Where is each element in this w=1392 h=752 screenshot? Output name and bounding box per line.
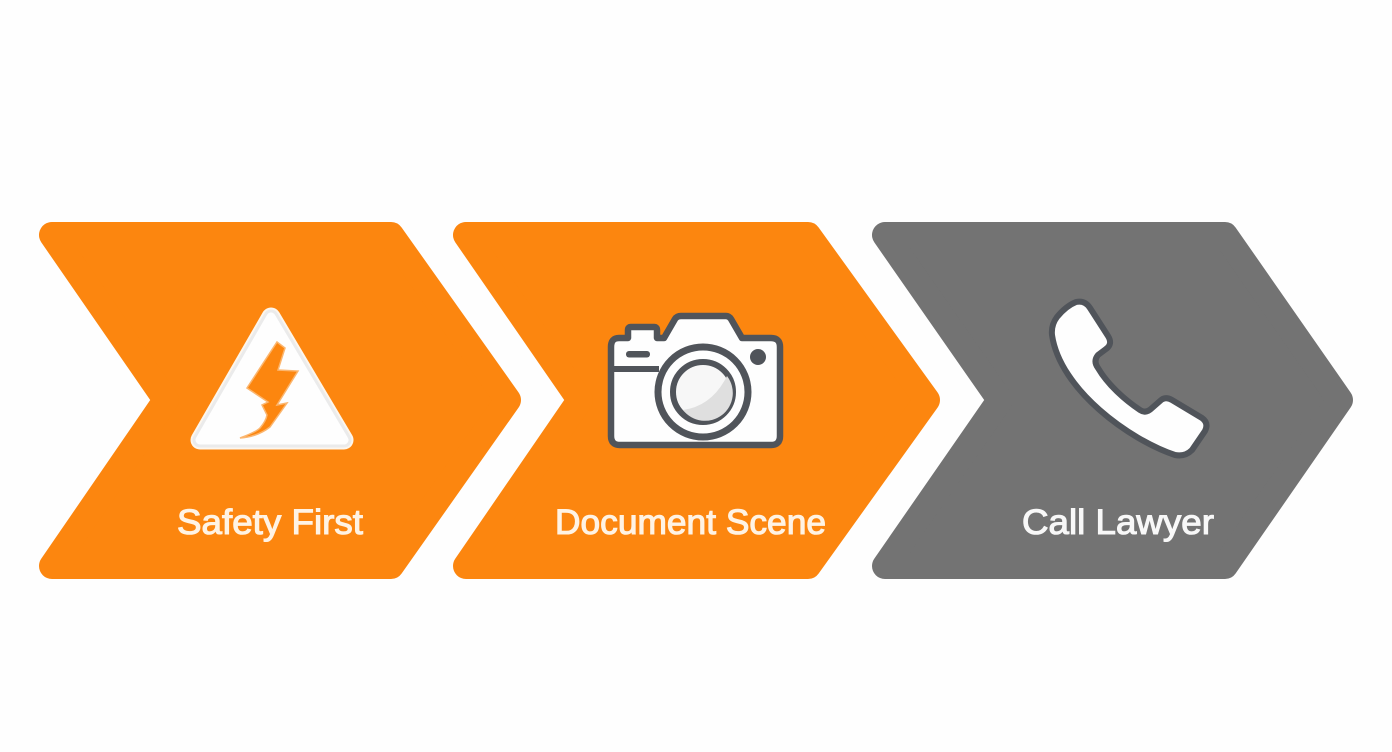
panel: step 2 document scene xyxy=(466,235,927,566)
icon: warning triangle with lightning bolt xyxy=(200,317,344,440)
chevron: step 1 xyxy=(52,235,508,566)
chevron: step 2 xyxy=(466,235,927,566)
label: document scene: Document Scene xyxy=(555,503,826,542)
panel: step 3 call lawyer xyxy=(885,235,1340,566)
label: call lawyer: Call Lawyer xyxy=(1022,503,1214,542)
icon: telephone handset xyxy=(1052,302,1206,455)
icon: camera xyxy=(611,316,780,445)
chevron: step 3 xyxy=(885,235,1340,566)
label: safety first: Safety First xyxy=(177,503,363,542)
panel: step 1 safety first xyxy=(52,235,508,566)
